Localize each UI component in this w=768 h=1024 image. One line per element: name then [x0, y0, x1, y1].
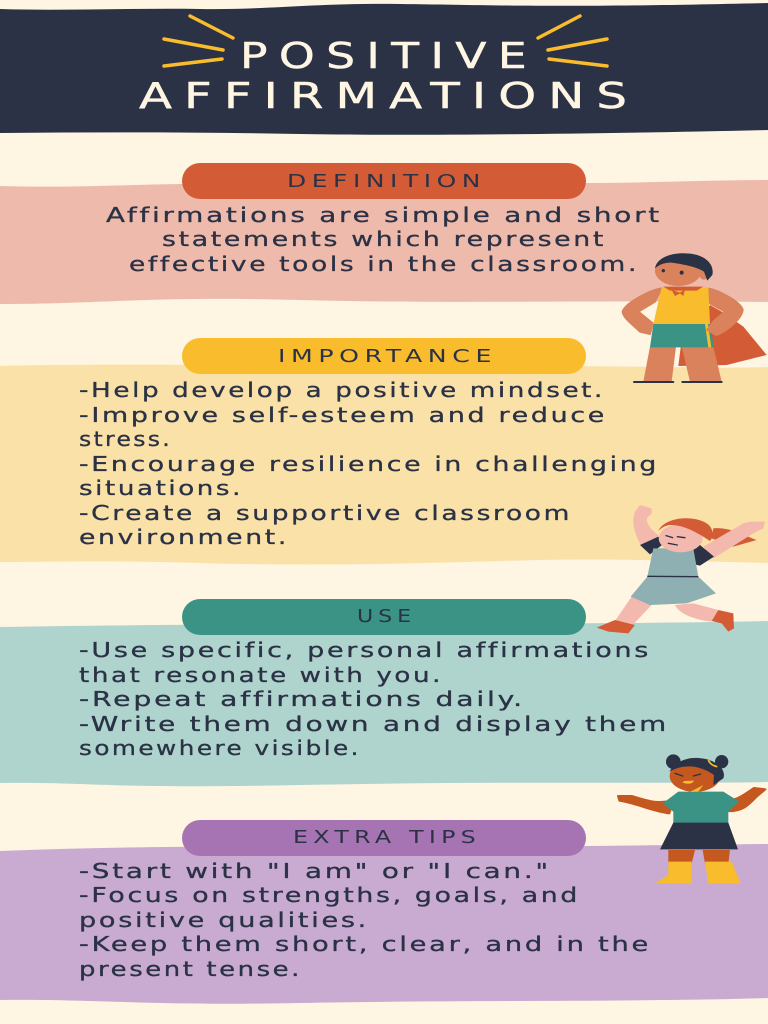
icon: sun rays	[164, 16, 607, 66]
text block: importance: stress.	[79, 427, 172, 451]
title: AFFIRMATIONS	[139, 76, 639, 117]
heading: definition	[182, 163, 586, 199]
text block: definition: statements which represent	[162, 227, 606, 251]
text block: definition: effective tools in the classroom.	[129, 252, 639, 276]
text block: importance: situations.	[79, 476, 243, 500]
panel: definition band	[0, 180, 768, 304]
text block: importance: environment.	[79, 525, 289, 549]
text block: use: -Write them down and display them	[79, 712, 669, 736]
panel: importance band	[0, 365, 768, 564]
heading: use	[182, 599, 586, 635]
text block: extra tips	[79, 859, 651, 981]
text block: definition: Affirmations are simple and short	[106, 203, 662, 227]
heading: extra tips	[182, 820, 586, 856]
heading: use: USE	[357, 606, 416, 627]
text block: importance: -Help develop a positive mindset.	[79, 378, 605, 402]
heading: definition: DEFINITION	[287, 171, 486, 192]
panel: use band	[0, 621, 768, 786]
text block: importance: -Encourage resilience in challenging	[79, 452, 659, 476]
text block: extra tips: -Start with "I am" or "I can."	[79, 859, 551, 883]
title	[139, 36, 639, 117]
text block: importance	[79, 378, 659, 549]
text block: extra tips: positive qualities.	[79, 908, 369, 932]
icon: boy in cape	[623, 253, 767, 382]
title: POSITIVE	[240, 36, 538, 77]
icon: running girl	[597, 505, 765, 633]
text block: extra tips: present tense.	[79, 957, 302, 981]
text block: extra tips: -Focus on strengths, goals, and	[79, 883, 580, 907]
text block: use	[79, 638, 669, 760]
panel: title banner	[0, 3, 768, 135]
panel: extra tips band	[0, 844, 768, 1004]
text block: extra tips: -Keep them short, clear, and in the	[79, 932, 651, 956]
text block: definition	[106, 203, 662, 276]
heading: importance	[182, 338, 586, 374]
text block: importance: -Create a supportive classroom	[79, 501, 572, 525]
text block: use: that resonate with you.	[79, 663, 443, 687]
icon: girl with buns	[618, 754, 765, 883]
heading: extra tips: EXTRA TIPS	[293, 827, 481, 848]
text block: use: -Use specific, personal affirmations	[79, 638, 651, 662]
text block: use: -Repeat affirmations daily.	[79, 687, 525, 711]
text block: importance: -Improve self-esteem and reduce	[79, 403, 607, 427]
heading: importance: IMPORTANCE	[278, 346, 497, 367]
text block: use: somewhere visible.	[79, 736, 361, 760]
